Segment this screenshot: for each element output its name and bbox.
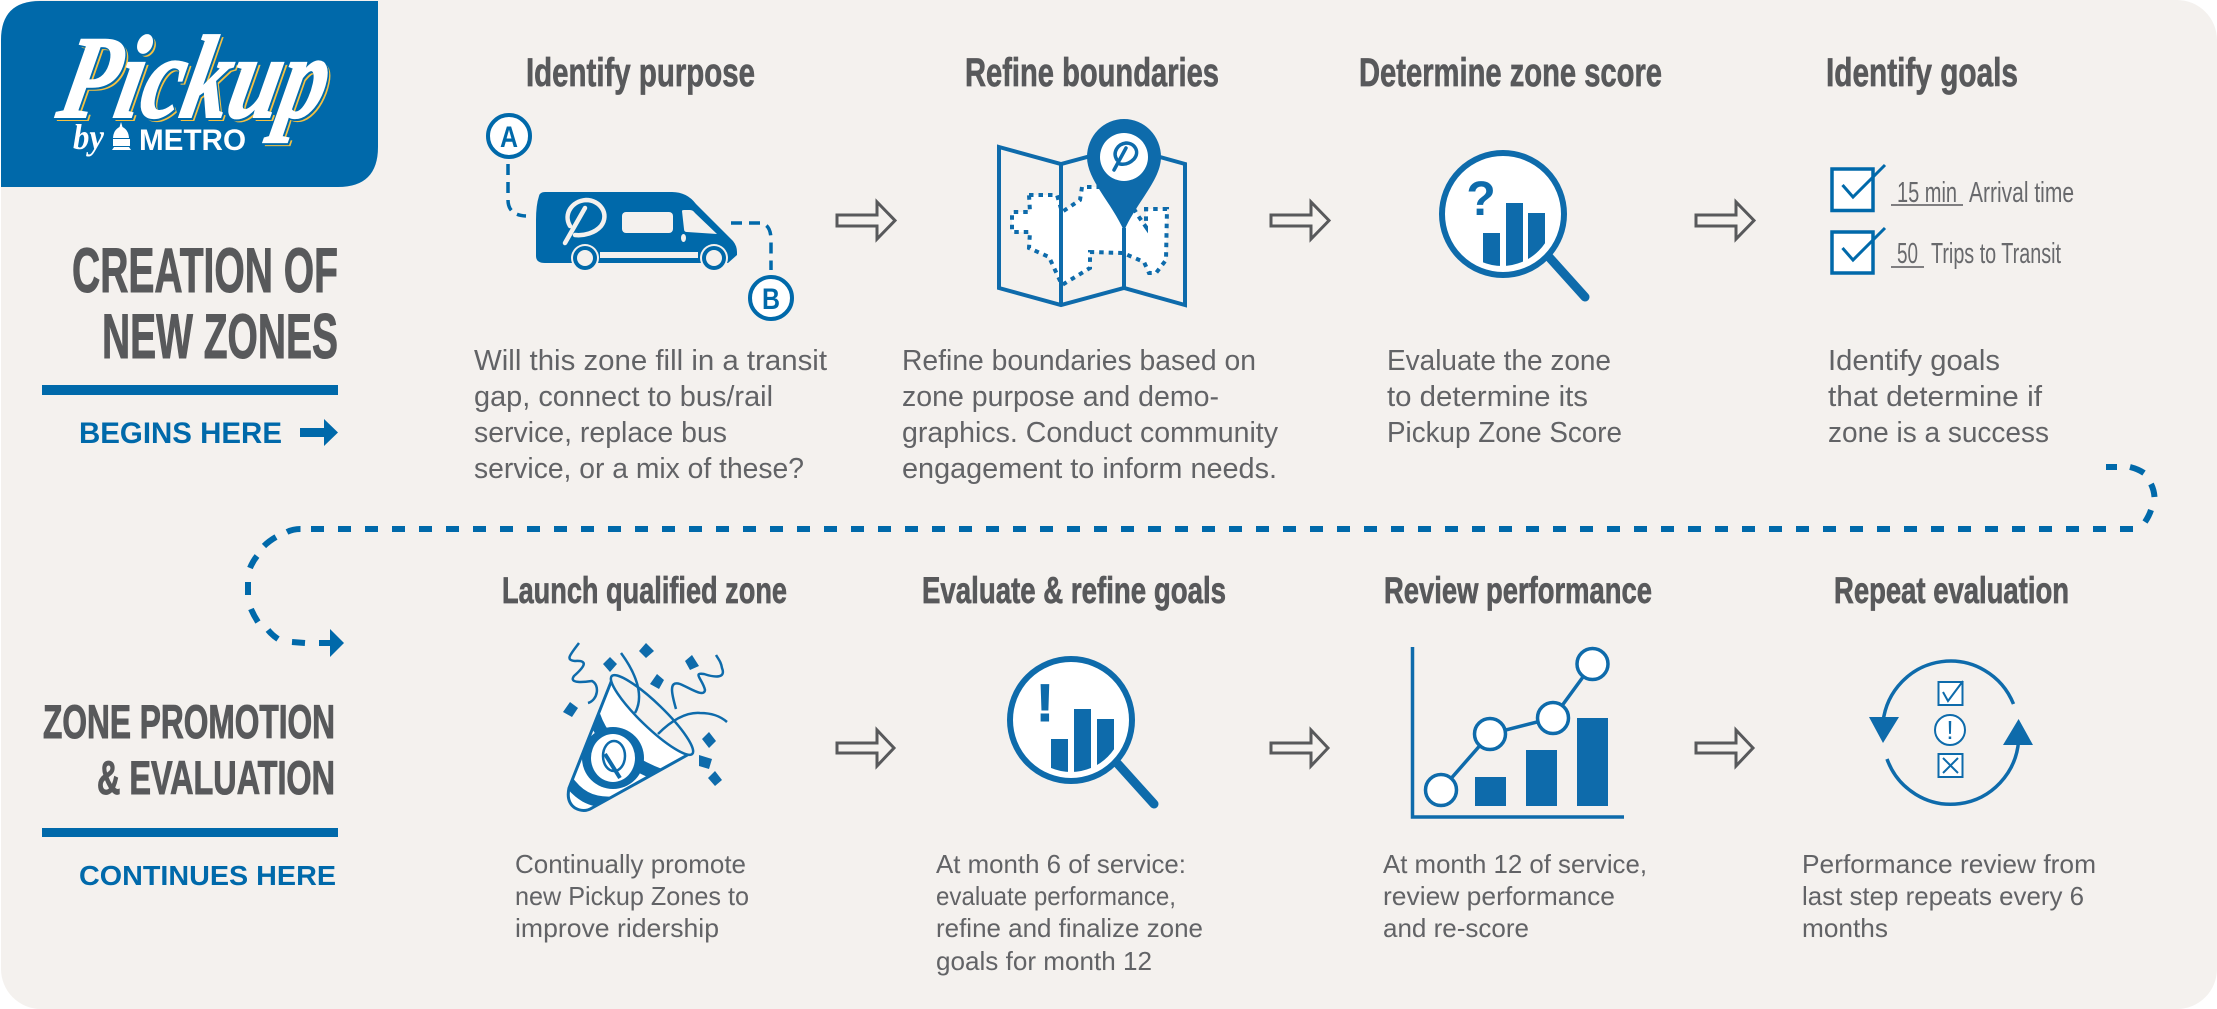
description: goals for month 12 [936, 946, 1152, 976]
arrow [837, 202, 895, 239]
description [1387, 345, 1622, 449]
icon: repeat cycle [1869, 661, 2033, 804]
description: zone is a success [1828, 417, 2049, 449]
icon: magnifier with exclamation and bars: ! [1036, 674, 1054, 733]
description: and re-score [1383, 913, 1529, 943]
goal: arrival time [1832, 165, 2074, 210]
description: Will this zone fill in a transit [474, 345, 827, 377]
description: zone purpose and demo- [902, 381, 1219, 413]
description: Evaluate the zone [1387, 345, 1611, 377]
step: identify purpose [474, 51, 827, 485]
description: Refine boundaries based on [902, 345, 1256, 377]
step: refine boundaries [902, 51, 1278, 485]
goal: arrival time: Arrival time [1969, 177, 2074, 209]
dashed connector between rows [248, 467, 2154, 657]
logo: by: by [73, 117, 105, 157]
goal: arrival time: 15 min [1897, 177, 1957, 209]
step: determine zone score [1359, 51, 1662, 449]
arrow [1696, 730, 1753, 766]
description: months [1802, 913, 1888, 943]
icon: magnifier with question mark and bars: ? [1466, 173, 1496, 226]
description [936, 849, 1203, 976]
title text: NEW ZONES [102, 302, 338, 372]
icon: map with pin [999, 119, 1185, 305]
icon: magnifier with question mark and bars [1442, 153, 1585, 297]
description: At month 12 of service, [1383, 849, 1647, 879]
description [1802, 849, 2096, 943]
rule [42, 828, 338, 837]
title text [43, 695, 335, 804]
heading: Refine boundaries [965, 51, 1219, 95]
icon: van route from A to B: B [762, 283, 780, 316]
step: review performance [1383, 570, 1652, 943]
logo background [1, 1, 378, 187]
heading: Determine zone score [1359, 51, 1662, 95]
description: last step repeats every 6 [1802, 881, 2084, 911]
heading: Repeat evaluation [1834, 570, 2069, 611]
description: engagement to inform needs. [902, 453, 1277, 485]
icon: performance chart [1412, 647, 1624, 817]
begins here label: BEGINS HERE [79, 417, 282, 450]
description [515, 849, 749, 943]
description: Performance review from [1802, 849, 2096, 879]
description: service, or a mix of these? [474, 453, 804, 485]
icon: van route from A to B [488, 115, 792, 319]
title text [72, 236, 338, 372]
description: service, replace bus [474, 417, 727, 449]
description: graphics. Conduct community [902, 417, 1278, 449]
icon: capitol [112, 122, 131, 150]
section title: creation of new zones [42, 236, 338, 450]
rule [42, 385, 338, 395]
description: gap, connect to bus/rail [474, 381, 773, 413]
heading: Evaluate & refine goals [922, 570, 1226, 611]
title text: CREATION OF [72, 236, 338, 306]
description: that determine if [1828, 381, 2043, 413]
logo: METRO: METRO [139, 124, 246, 157]
icon: repeat cycle: ! [1946, 715, 1954, 745]
icon: van route from A to B: A [500, 121, 518, 154]
arrow [837, 730, 894, 766]
heading: Identify purpose [526, 51, 755, 95]
description [474, 345, 827, 485]
arrow [1271, 202, 1329, 239]
description: refine and finalize zone [936, 913, 1203, 943]
step: evaluate and refine goals [922, 570, 1226, 976]
icon: party popper [563, 643, 727, 810]
step: identify goals [1826, 51, 2074, 449]
goal: trips to transit [1832, 228, 2061, 273]
arrow [1271, 730, 1328, 766]
continues here label: CONTINUES HERE [79, 860, 336, 891]
logo wordmark: Pickup: Pickup [50, 14, 344, 144]
section title: zone promotion and evaluation [42, 695, 338, 891]
logo panel [1, 1, 378, 187]
description: At month 6 of service: [936, 849, 1186, 879]
icon: goal checklist [1832, 165, 2074, 273]
description [902, 345, 1278, 485]
step: launch qualified zone [502, 570, 787, 943]
description: Continually promote [515, 849, 746, 879]
step: repeat evaluation [1802, 570, 2096, 943]
description: review performance [1383, 881, 1615, 911]
description: new Pickup Zones to [515, 881, 749, 911]
heading: Identify goals [1826, 51, 2018, 95]
description: evaluate performance, [936, 881, 1176, 911]
title text: & EVALUATION [97, 751, 335, 804]
arrow: begins here [300, 419, 338, 446]
goal: trips to transit: 50 [1897, 238, 1918, 270]
description: Identify goals [1828, 345, 2000, 377]
description: Pickup Zone Score [1387, 417, 1622, 449]
description: to determine its [1387, 381, 1588, 413]
heading: Review performance [1384, 570, 1652, 611]
goal: trips to transit: Trips to Transit [1931, 238, 2061, 270]
title text: ZONE PROMOTION [43, 695, 335, 748]
description: improve ridership [515, 913, 719, 943]
heading: Launch qualified zone [502, 570, 787, 611]
description [1828, 345, 2049, 449]
arrow [1696, 202, 1754, 239]
description [1383, 849, 1647, 943]
icon: magnifier with exclamation and bars [1010, 659, 1154, 804]
logo wordmark: Pickup: Pickup [49, 12, 343, 143]
logo wordmark: Pickup: Pickup [52, 15, 346, 146]
